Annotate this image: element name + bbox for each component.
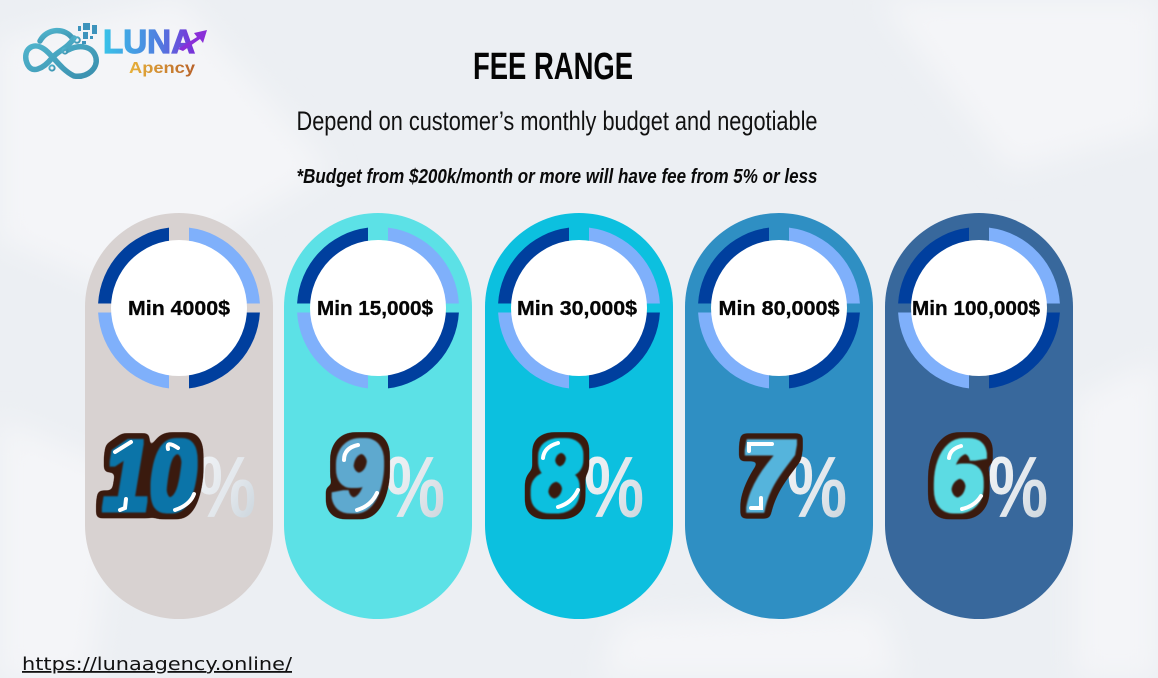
ring	[297, 228, 459, 388]
panel: tier 7%	[685, 213, 873, 619]
panel: tier 9%	[284, 213, 472, 619]
panel: tier 10%	[85, 213, 273, 619]
panel: tier 8%	[485, 213, 673, 619]
percent sign: %	[787, 440, 847, 536]
ring	[698, 228, 860, 388]
minimum budget: Min 100,000$	[912, 298, 1040, 320]
fee number: 9	[332, 420, 382, 531]
title: FEE RANGE	[473, 46, 633, 88]
pill background	[685, 213, 873, 619]
icon: infinity loop	[26, 31, 96, 76]
fee number: 10	[103, 420, 196, 531]
percent sign: %	[584, 440, 644, 536]
minimum budget: Min 80,000$	[718, 298, 840, 320]
ring	[498, 228, 660, 388]
percent sign: %	[988, 440, 1048, 536]
percent sign: %	[385, 440, 445, 536]
minimum budget: Min 15,000$	[317, 298, 433, 320]
pill background	[485, 213, 673, 619]
logo: Luna Agency	[26, 23, 207, 77]
pill background	[885, 213, 1073, 619]
pill background	[85, 213, 273, 619]
fee number: 7	[741, 420, 795, 531]
ring	[898, 228, 1060, 388]
icon: data pixels	[78, 23, 97, 44]
logo wordmark: LUNA	[103, 23, 195, 60]
subtitle: Depend on customer’s monthly budget and negotiable	[296, 106, 818, 136]
panel: tier 6%	[885, 213, 1073, 619]
fee number: 6	[932, 420, 985, 531]
pill background	[284, 213, 472, 619]
minimum budget: Min 4000$	[128, 298, 230, 320]
budget note: *Budget from $200k/month or more will have fee from 5% or less	[296, 166, 818, 188]
fee number: 8	[532, 420, 581, 531]
website link: https://lunaagency.online/	[22, 654, 293, 675]
ring	[98, 228, 260, 388]
icon: arrow	[178, 30, 207, 51]
minimum budget: Min 30,000$	[517, 298, 637, 320]
percent sign: %	[196, 440, 256, 536]
logo subtitle: Apency	[129, 60, 195, 77]
